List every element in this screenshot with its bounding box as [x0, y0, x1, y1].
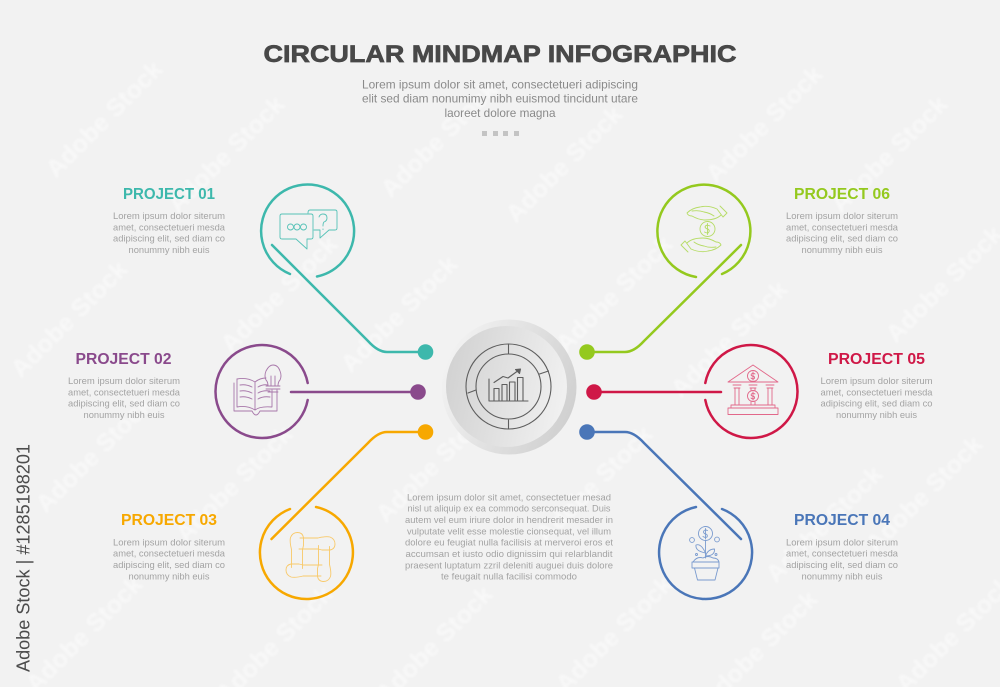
stock watermarks: Adobe Stock	[5, 255, 133, 383]
text: project 04: adipiscing elit, sed diam co	[786, 560, 898, 570]
title dots	[482, 131, 519, 136]
stock watermarks: Adobe Stock	[162, 90, 290, 218]
subtitle: laoreet dolore magna	[444, 106, 556, 120]
text: project 05	[820, 376, 933, 420]
heading: project 03: PROJECT 03	[121, 512, 217, 529]
heading: project 04: PROJECT 04	[794, 512, 890, 529]
stock watermarks: Adobe Stock	[550, 230, 678, 358]
icon: chat bubbles	[280, 210, 337, 249]
text: project 05: Lorem ipsum dolor siterum	[820, 376, 933, 386]
text: project 06: nonummy nibh euis	[802, 245, 883, 255]
stock id vertical label: Adobe Stock | #1285198201	[14, 444, 34, 672]
text: project 06	[786, 211, 899, 255]
icon: four linked hands	[286, 532, 335, 582]
text: project 03: Lorem ipsum dolor siterum	[113, 537, 225, 547]
central paragraph: Lorem ipsum dolor sit amet, consectetuer mesad	[407, 492, 611, 502]
stock watermarks: Adobe Stock	[40, 55, 168, 183]
text: project 04	[786, 537, 899, 581]
panel: project 06	[579, 185, 899, 360]
title: CIRCULAR MINDMAP INFOGRAPHIC	[264, 41, 737, 68]
ring and connector 01	[261, 184, 433, 360]
text: project 01: adipiscing elit, sed diam co	[113, 234, 225, 244]
text: project 05: nonummy nibh euis	[836, 410, 917, 420]
text: project 02	[68, 376, 181, 420]
text: project 05: adipiscing elit, sed diam co	[820, 399, 932, 409]
text: project 02: amet, consectetueri mesda	[68, 387, 181, 397]
text: project 03: amet, consectetueri mesda	[113, 549, 226, 559]
stock watermarks: Adobe Stock	[860, 430, 988, 558]
central paragraph: nisl ut aliquip ex ea commodo serconsequat. Duis	[408, 504, 611, 514]
text: project 02: Lorem ipsum dolor siterum	[68, 376, 180, 386]
icon: bank building	[728, 365, 778, 414]
text: project 06: amet, consectetueri mesda	[786, 222, 899, 232]
ring and connector 03	[260, 424, 433, 599]
panel: project 01	[113, 184, 433, 360]
stock watermarks: Adobe Stock	[530, 420, 658, 548]
central paragraph: vulputate velit esse molestie cionsequat, vel illum	[407, 526, 611, 536]
central paragraph	[405, 492, 613, 582]
stock watermarks: Adobe Stock	[170, 420, 298, 548]
central hub icon: growth chart in ring	[466, 344, 551, 429]
central paragraph: dolore eu feugiat nulla facilisis at merveroi eros et	[405, 538, 613, 548]
heading: project 02: PROJECT 02	[76, 351, 172, 368]
stock watermarks: Adobe Stock	[375, 75, 503, 203]
text: project 02: adipiscing elit, sed diam co	[68, 399, 180, 409]
panel: project 02	[68, 345, 426, 438]
stock watermarks: Adobe Stock	[30, 390, 158, 518]
text: project 01	[113, 211, 226, 255]
text: project 05: amet, consectetueri mesda	[820, 387, 933, 397]
stock watermarks: Adobe Stock	[215, 230, 343, 358]
stock watermarks: Adobe Stock	[700, 60, 828, 188]
panel: project 03	[113, 424, 433, 599]
icon: book and light bulb	[234, 365, 281, 415]
icon: money plant	[690, 526, 719, 580]
central hub disc	[442, 320, 576, 454]
text: project 04: Lorem ipsum dolor siterum	[786, 537, 898, 547]
heading: project 05: PROJECT 05	[828, 351, 925, 368]
text: project 03	[113, 537, 226, 581]
stock watermarks: Adobe Stock	[335, 250, 463, 378]
subtitle	[362, 78, 638, 120]
heading: project 01: PROJECT 01	[123, 186, 215, 203]
central paragraph: autem vel eum iriure dolor in hendrerit mesader in	[405, 515, 613, 525]
stock watermarks: Adobe Stock	[665, 275, 793, 403]
ring and connector 05	[586, 345, 798, 438]
subtitle: Lorem ipsum dolor sit amet, consectetueri adipiscing	[362, 78, 638, 92]
text: project 03: adipiscing elit, sed diam co	[113, 560, 225, 570]
text: project 06: Lorem ipsum dolor siterum	[786, 211, 898, 221]
central paragraph: te feugait nulla facilisi commodo	[441, 572, 577, 582]
stock watermarks: Adobe Stock	[500, 100, 628, 228]
ring and connector 02	[215, 345, 426, 438]
panel: project 04	[579, 424, 899, 599]
text: project 01: amet, consectetueri mesda	[113, 222, 226, 232]
central paragraph: praesent luptatum zzril deleniti auguei duis dolore	[405, 560, 613, 570]
icon: hands exchanging coin	[681, 206, 727, 252]
ring and connector 06	[579, 185, 750, 360]
stock watermarks: Adobe Stock	[760, 460, 888, 588]
text: project 06: adipiscing elit, sed diam co	[786, 234, 898, 244]
ring and connector 04	[579, 424, 752, 599]
text: project 04: amet, consectetueri mesda	[786, 549, 899, 559]
heading: project 06: PROJECT 06	[794, 186, 890, 203]
text: project 01: nonummy nibh euis	[128, 245, 210, 255]
central paragraph: accumsan et iusto odio dignissim qui relarblandit	[406, 549, 613, 559]
text: project 04: nonummy nibh euis	[802, 571, 883, 581]
text: project 03: nonummy nibh euis	[128, 571, 210, 581]
text: project 02: nonummy nibh euis	[84, 410, 165, 420]
text: project 01: Lorem ipsum dolor siterum	[113, 211, 225, 221]
stock watermarks: Adobe Stock	[370, 400, 498, 528]
stock watermarks: Adobe Stock	[825, 90, 953, 218]
panel: project 05	[586, 345, 933, 438]
subtitle: elit sed diam nonumimy nibh euismod tincidunt utare	[362, 92, 638, 106]
